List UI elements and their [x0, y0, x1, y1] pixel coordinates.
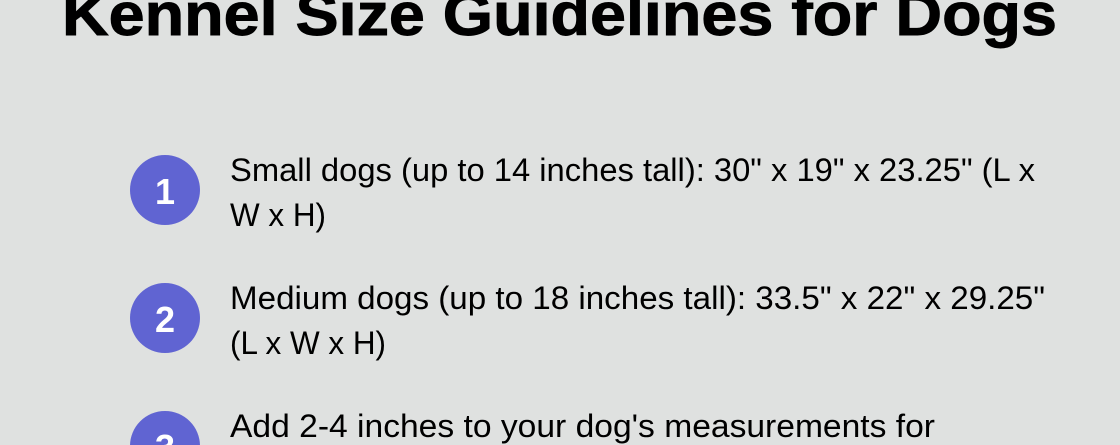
- number badge 1: 1: [155, 171, 175, 212]
- number badge 2: 2: [155, 299, 175, 340]
- number badge 3: [130, 411, 200, 445]
- text: medium dogs guideline: Medium dogs (up to 18 inches tall): 33.5" x 22" x 29.25": [230, 280, 1045, 316]
- text: small dogs guideline: W x H): [230, 197, 326, 233]
- text: medium dogs guideline: [230, 280, 1045, 361]
- text: medium dogs guideline: (L x W x H): [230, 325, 386, 361]
- list item 1: small dogs: [130, 152, 1035, 233]
- list item 2: medium dogs: [130, 280, 1045, 361]
- list item 3: add inches: [130, 408, 935, 445]
- text: measurement allowance: Add 2-4 inches to your dog's measurements for: [230, 408, 935, 444]
- number badge 1: [130, 155, 200, 225]
- number badge 2: [130, 283, 200, 353]
- text: small dogs guideline: Small dogs (up to 14 inches tall): 30" x 19" x 23.25" (L x: [230, 152, 1035, 188]
- text: small dogs guideline: [230, 152, 1035, 233]
